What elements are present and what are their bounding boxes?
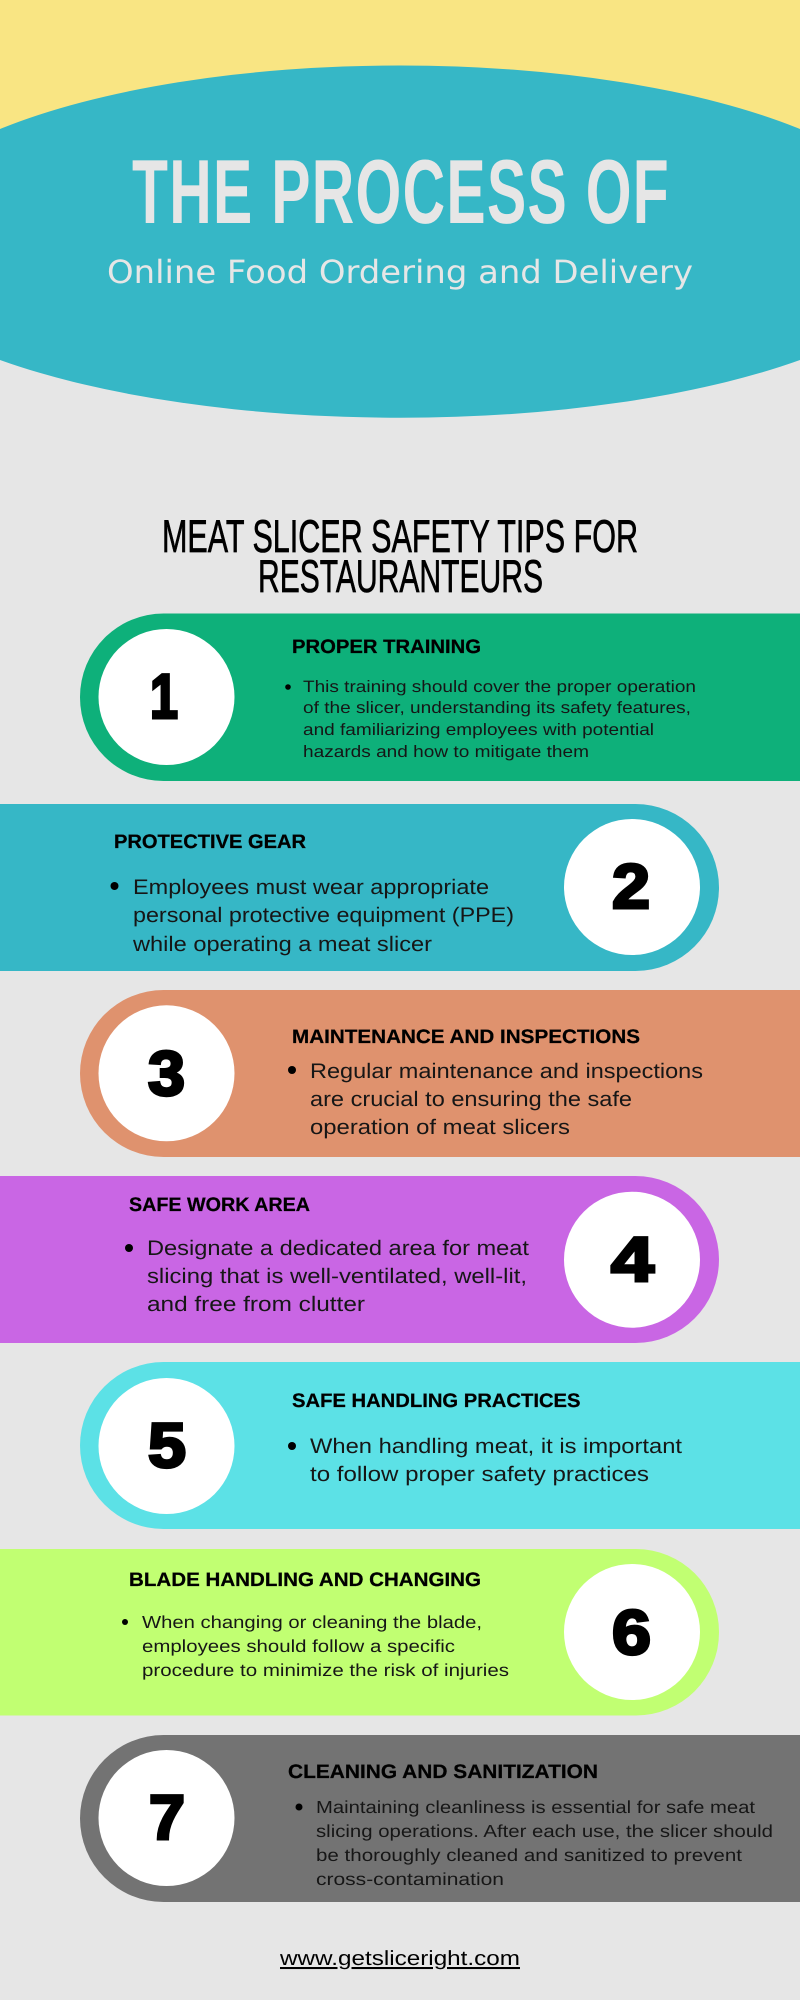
- icon: number 2 badge: 2: [612, 852, 650, 922]
- step 7 text: Maintaining cleanliness is essential for safe meat: [316, 1797, 755, 1817]
- subtitle: Online Food Ordering and Delivery: [107, 253, 693, 291]
- icon: number 5 badge: [98, 1378, 234, 1514]
- panel: step 2 protective gear: [0, 804, 719, 971]
- step 7 text: [296, 1797, 773, 1889]
- step 1 text: hazards and how to mitigate them: [303, 743, 589, 761]
- step 2 text: Employees must wear appropriate: [133, 876, 489, 899]
- step 1 text: [285, 678, 696, 761]
- step 4 text: [125, 1237, 529, 1316]
- step 7 heading: CLEANING AND SANITIZATION: [288, 1761, 598, 1783]
- step 2 text: while operating a meat slicer: [132, 933, 432, 956]
- step 3 text: operation of meat slicers: [310, 1116, 570, 1139]
- step 2 heading: PROTECTIVE GEAR: [114, 831, 306, 853]
- step 2 text: [110, 876, 514, 956]
- step 7 text: cross-contamination: [316, 1869, 504, 1889]
- panel: step 4 safe work area: [0, 1176, 719, 1343]
- step 4 text: and free from clutter: [147, 1293, 365, 1316]
- step 6 text: When changing or cleaning the blade,: [142, 1612, 482, 1632]
- step 4 text: slicing that is well-ventilated, well-lit,: [147, 1265, 527, 1288]
- header banner: [0, 0, 800, 418]
- panel: step 5 safe handling practices: [80, 1362, 800, 1529]
- panel: step 7 cleaning and sanitization: [80, 1735, 800, 1902]
- step 1 text: and familiarizing employees with potential: [303, 721, 654, 739]
- panel: step 3 maintenance and inspections: [80, 990, 800, 1157]
- step 1 text: of the slicer, understanding its safety features,: [303, 699, 691, 717]
- icon: number 6 badge: 6: [612, 1598, 651, 1668]
- panel: step 6 blade handling and changing: [0, 1549, 719, 1716]
- icon: number 4 badge: 4: [611, 1225, 654, 1295]
- panel: step 1 proper training: [80, 614, 800, 781]
- icon: number 3 badge: [98, 1005, 234, 1141]
- icon: number 5 badge: 5: [148, 1411, 186, 1481]
- step 6 text: procedure to minimize the risk of injuries: [142, 1660, 509, 1680]
- icon: number 7 badge: 7: [149, 1783, 185, 1853]
- icon: number 4 badge: [564, 1192, 700, 1328]
- step 4 text: Designate a dedicated area for meat: [147, 1237, 529, 1260]
- icon: number 2 badge: [564, 819, 700, 955]
- step 5 text: to follow proper safety practices: [310, 1463, 649, 1486]
- website link: www.getsliceright.com: [279, 1947, 520, 1970]
- step 3 text: Regular maintenance and inspections: [310, 1060, 703, 1083]
- step 7 text: slicing operations. After each use, the slicer should: [316, 1821, 773, 1841]
- icon: number 7 badge: [98, 1750, 234, 1886]
- step 6 heading: BLADE HANDLING AND CHANGING: [129, 1569, 481, 1591]
- icon: number 1 badge: [98, 629, 234, 765]
- step 7 text: be thoroughly cleaned and sanitized to prevent: [316, 1845, 742, 1865]
- icon: number 3 badge: 3: [148, 1039, 185, 1109]
- step 5 text: When handling meat, it is important: [310, 1435, 682, 1458]
- main heading: [162, 510, 638, 602]
- step 6 text: employees should follow a specific: [142, 1636, 455, 1656]
- step 5 heading: SAFE HANDLING PRACTICES: [292, 1390, 580, 1412]
- step 3 text: are crucial to ensuring the safe: [310, 1088, 632, 1111]
- step 3 text: [288, 1060, 703, 1139]
- step 3 heading: MAINTENANCE AND INSPECTIONS: [292, 1026, 640, 1048]
- step 1 text: This training should cover the proper operation: [303, 678, 696, 696]
- step 5 text: [288, 1435, 682, 1486]
- step 6 text: [122, 1612, 509, 1680]
- step 2 text: personal protective equipment (PPE): [133, 904, 514, 927]
- step 4 heading: SAFE WORK AREA: [129, 1194, 310, 1216]
- icon: number 1 badge: 1: [150, 662, 178, 732]
- main heading: RESTAURANTEURS: [258, 550, 543, 602]
- step 1 heading: PROPER TRAINING: [292, 636, 481, 658]
- icon: number 6 badge: [564, 1564, 700, 1700]
